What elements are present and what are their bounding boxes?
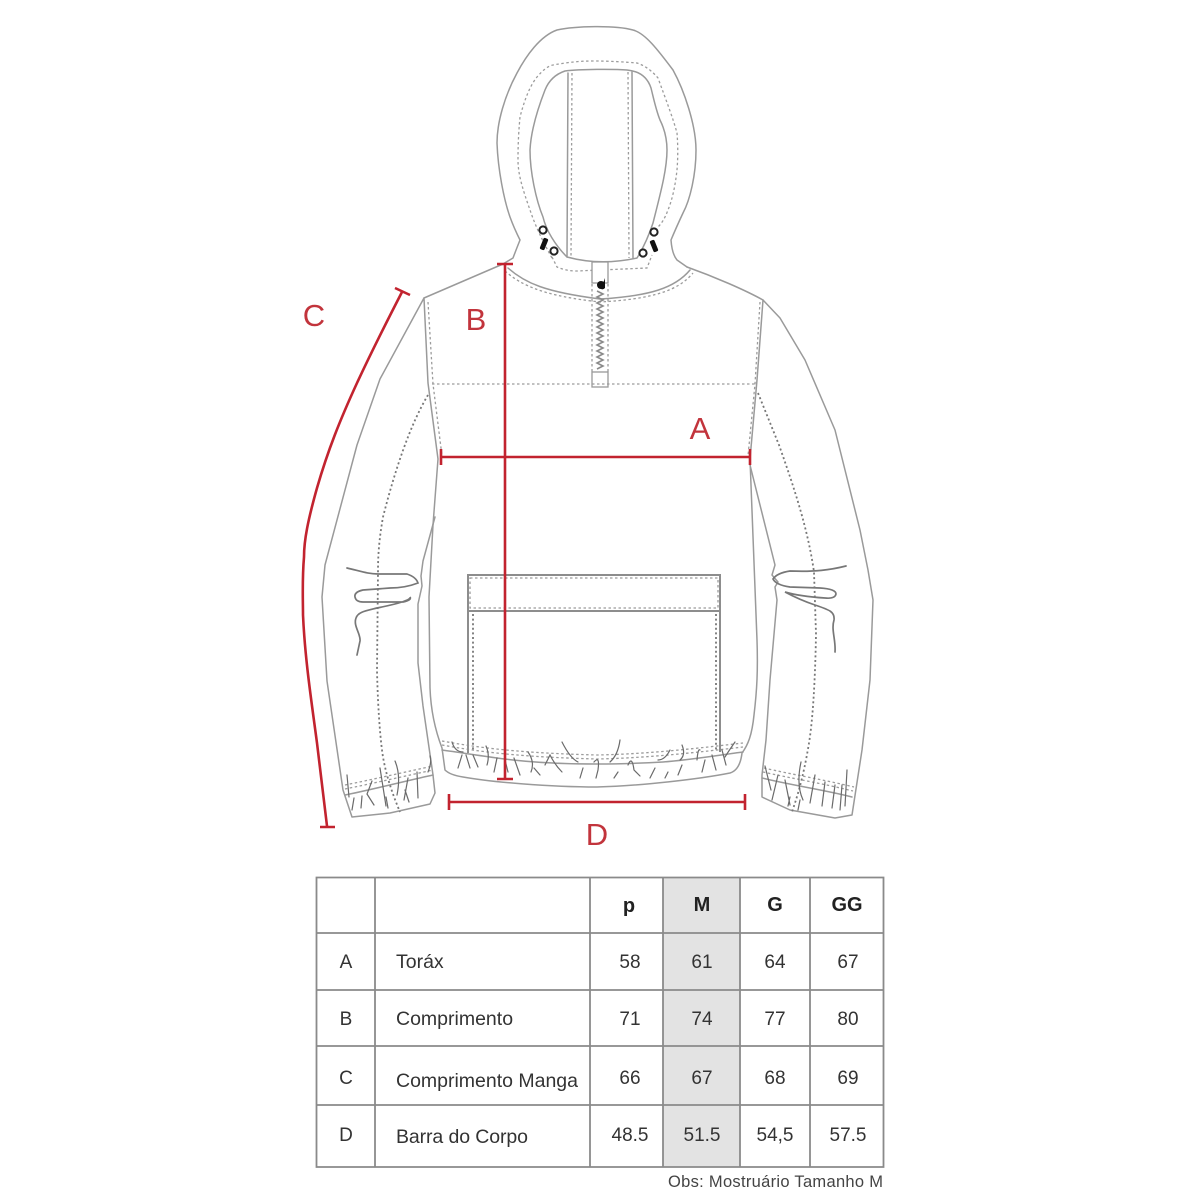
row B: 74 <box>691 1009 713 1030</box>
header row: GG <box>831 894 863 916</box>
row A: 58 <box>619 952 641 973</box>
row B: B <box>340 1009 352 1030</box>
header row: G <box>767 894 783 916</box>
highlighted M column <box>663 877 740 1167</box>
hood <box>497 27 696 302</box>
measurement line D: hem: D <box>586 817 608 852</box>
row B: 80 <box>837 1009 859 1030</box>
row B: 71 <box>619 1009 641 1030</box>
row A: 64 <box>764 952 786 973</box>
front pocket <box>468 575 720 753</box>
hem gathers <box>452 740 735 778</box>
left sleeve <box>322 298 435 817</box>
jacket technical drawing <box>322 27 873 818</box>
measurement line A: chest: A <box>690 411 711 446</box>
right sleeve <box>750 300 873 818</box>
footnote: Obs: Mostruário Tamanho M <box>668 1173 883 1191</box>
row D: D <box>339 1125 353 1146</box>
row A: 67 <box>837 952 859 973</box>
header row: p <box>623 895 635 917</box>
row B: 77 <box>764 1009 786 1030</box>
row D: Barra do Corpo <box>396 1126 528 1148</box>
row A <box>340 951 859 973</box>
row A: Toráx <box>396 951 444 973</box>
row C: 69 <box>837 1068 859 1089</box>
row C: 66 <box>619 1068 641 1089</box>
drawcord toggles right <box>639 228 659 257</box>
row D: 48.5 <box>612 1125 648 1146</box>
row A: 61 <box>691 952 713 973</box>
header row: M <box>694 894 710 916</box>
row D: 54,5 <box>757 1125 793 1146</box>
measurement line A: chest <box>441 411 750 465</box>
table grid <box>316 877 884 1167</box>
row D: 57.5 <box>830 1125 866 1146</box>
measurement line B: length: B <box>466 302 486 337</box>
row B: Comprimento <box>396 1008 513 1030</box>
row D: 51.5 <box>684 1125 720 1146</box>
row C: C <box>339 1068 353 1089</box>
row C: 67 <box>691 1068 713 1089</box>
row A: A <box>340 952 353 973</box>
row D <box>339 1125 866 1148</box>
drawcord toggles left <box>539 226 558 255</box>
measurement line C: sleeve <box>303 288 410 827</box>
size table <box>316 877 884 1167</box>
body outline <box>424 264 763 787</box>
measurement line C: sleeve: C <box>303 298 325 333</box>
measurement line D: hem <box>449 794 745 852</box>
header row <box>623 894 863 917</box>
row C: Comprimento Manga <box>396 1070 578 1092</box>
row C: 68 <box>764 1068 786 1089</box>
row C <box>339 1068 859 1092</box>
measurement line B: length <box>466 264 513 779</box>
row B <box>340 1008 859 1030</box>
half zip <box>592 262 608 387</box>
